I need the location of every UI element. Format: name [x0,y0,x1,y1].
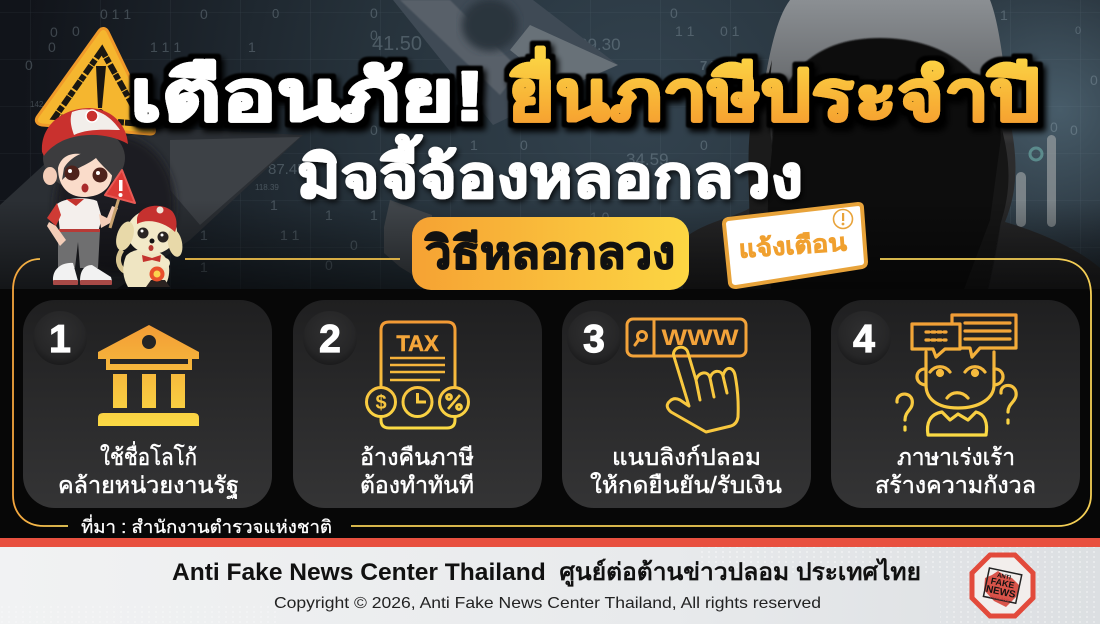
background ticker numbers: 1 [370,207,378,223]
background ticker numbers: 74.8 [700,58,725,73]
alert stamp [724,204,866,287]
alert mark [834,210,852,228]
boy shirt and arms [47,198,118,246]
panel: step 4 [831,300,1080,508]
number 1 badge: 1 [49,318,71,361]
number 1 badge [33,311,87,365]
footer logo: FAKE [990,576,1015,590]
alert stamp: แจ้งเตือน [738,229,848,264]
source note: ที่มา : สำนักงานตำรวจแห่งชาติ [81,514,332,537]
background ticker numbers: 1 [470,137,478,153]
background ticker numbers: 1 0 [590,209,610,225]
heading pill [412,217,689,290]
background ticker numbers: 0 [25,57,33,73]
background ticker numbers: 0 [370,122,378,138]
subtitle: มิจจี้จ้องหลอกลวง [297,135,803,210]
red divider [0,538,1100,547]
background ticker numbers: 0 [650,117,658,133]
panel: step 3 [562,300,811,508]
background ticker numbers: 0 [200,6,208,22]
background ticker numbers: 118.39 [255,183,279,192]
background ticker numbers: 0 1 1 [100,6,131,22]
number 2 badge: 2 [319,318,341,361]
dollar bill small [384,200,432,285]
number 3 badge: 3 [583,318,605,361]
panel: step 2 [293,300,542,508]
background ticker numbers: 0 [1090,72,1098,88]
footer logo [972,555,1033,616]
heading pill: วิธีหลอกลวง [424,229,675,278]
boy head with cap [42,108,128,197]
number 4 badge: 4 [853,318,875,361]
background ticker numbers: 1 [270,197,278,213]
background ticker numbers: 0 [50,24,58,40]
background ticker numbers: 0 [72,23,80,39]
icon: tax document: TAX [396,331,439,356]
background ticker numbers: 1 [325,207,333,223]
caption 4: ภาษาเร่งเร้า [897,444,1015,470]
icon: government building [98,325,199,426]
panel: step 1 [23,300,272,508]
caption 3: แนบลิงก์ปลอม [612,444,761,470]
background ticker numbers: 39.30 [578,35,621,54]
background ticker numbers: 34.59 [626,150,669,169]
background ticker numbers: 0 [350,237,358,253]
gold frame [13,259,1091,526]
icon: worried person [897,315,1016,435]
footer logo: THAILAND [989,594,1010,603]
number 2 badge [303,311,357,365]
background ticker numbers: 0 [48,39,56,55]
background ticker numbers: 0 [520,137,528,153]
title line 1 [130,46,1040,135]
background ticker numbers [25,5,1098,275]
background ticker numbers: 0 [1070,122,1078,138]
icon: fake link click: WWW [662,325,739,350]
footer panel [0,547,1100,624]
caption 3: ให้กดยืนยัน/รับเงิน [590,472,782,498]
chart bars right [1016,135,1056,227]
title: warning word: เตือนภัย! [130,57,485,135]
caption 1: คล้ายหน่วยงานรัฐ [58,472,239,499]
background ticker numbers: 0 [370,5,378,21]
background ticker numbers: 0 [370,27,378,43]
background ticker numbers: 0 [700,137,708,153]
caption 1 [58,441,239,499]
background ticker numbers: 0 [1075,25,1081,37]
warning sign held [105,170,135,228]
mascot dog [113,206,185,287]
dollar bill top [393,0,618,125]
copyright: Copyright © 2026, Anti Fake News Center Thailand, All rights reserved [274,595,821,612]
boy legs and shoes [53,230,112,285]
icon: fake link click [627,319,746,432]
background ticker numbers: 1 [1000,7,1008,23]
icon: tax document: $ [375,392,387,414]
background ticker numbers: 0 [325,257,333,273]
number 3 badge [567,311,621,365]
caption 2: อ้างคืนภาษี [360,444,474,470]
background ticker numbers: 1 [200,259,208,275]
background ticker numbers: 41.50 [372,33,422,55]
title: annual tax filing: ยื่นภาษีประจำปี [508,46,1040,135]
background ticker numbers: 0 [272,6,279,21]
footer logo: NEWS [985,584,1017,601]
caption 1: ใช้ชื่อโลโก้ [100,441,197,470]
background ticker numbers: 87.45 [268,161,306,178]
footer logo: ANTI [996,573,1012,582]
dark lower fade [0,200,1100,290]
background ticker numbers: 1 1 1 [150,39,181,55]
icon: tax document [366,322,468,428]
caption 2 [360,444,474,498]
caption 2: ต้องทำทันที [360,472,474,498]
caption 4: สร้างความกังวล [875,472,1036,498]
background ticker numbers: 1 1 [280,227,300,243]
background ticker numbers: 0 [1050,119,1058,135]
background ticker numbers: 142.0 [30,100,51,109]
caption 4 [875,444,1036,498]
footer organisation name: Anti Fake News Center Thailand ศูนย์ต่อต้านข่าวปลอม ประเทศไทย [172,557,921,587]
background ticker numbers: 1 1 [675,23,695,39]
hooded figure [683,0,1100,300]
number 4 badge [837,311,891,365]
background ticker numbers: 0 1 [720,23,740,39]
mascot boy [42,108,135,285]
dollar bill left [0,128,303,300]
caption 3 [590,444,782,498]
background ticker numbers: 1 [200,227,208,243]
background ticker numbers: 0 [670,5,678,21]
warning triangle [36,28,154,134]
background ticker numbers: 1 [248,39,256,55]
